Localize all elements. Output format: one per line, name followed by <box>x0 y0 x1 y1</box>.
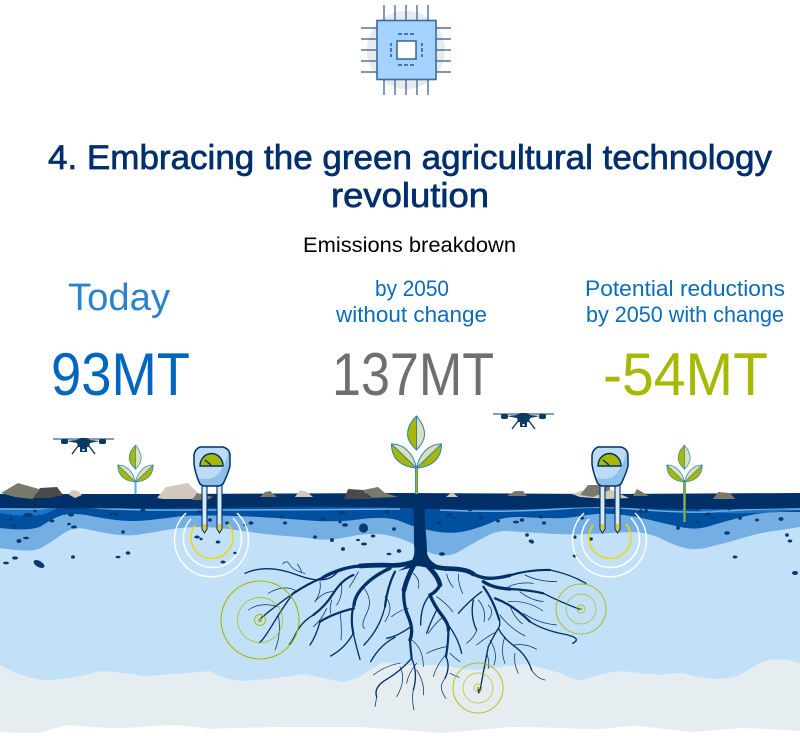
plant: right seedling <box>667 445 702 522</box>
sensor: right soil probe with signal rings <box>572 447 646 577</box>
column heading: today: Today <box>68 277 170 319</box>
title: revolution <box>331 177 489 215</box>
column heading: potential reductions: Potential reductions <box>585 276 785 301</box>
figure: -54MT with change: -54MT <box>603 341 768 408</box>
signal rings: left root <box>221 581 299 659</box>
plant: centre seedling <box>392 416 442 494</box>
column heading: by 2050 without change <box>335 276 487 327</box>
drone: right <box>493 413 554 429</box>
figure: 137MT without change: 137MT <box>332 341 494 408</box>
plant: left seedling <box>118 445 153 494</box>
signal rings: bottom root <box>453 663 503 713</box>
drone: left <box>53 438 114 454</box>
rocks <box>1 483 735 500</box>
signal rings: right root <box>556 584 606 634</box>
title: 4. Embracing the green agricultural technology <box>48 139 772 177</box>
title <box>48 139 772 215</box>
sensor: left soil probe with signal rings <box>174 447 248 577</box>
figure: 93MT today: 93MT <box>51 341 190 408</box>
subtitle: emissions breakdown: Emissions breakdown <box>303 234 516 257</box>
column heading: potential reductions <box>585 276 785 327</box>
column heading: by 2050 without change: without change <box>335 302 487 327</box>
column heading: by 2050 without change: by 2050 <box>375 276 449 301</box>
icon: microchip <box>361 5 451 95</box>
soil pebbles <box>3 506 798 575</box>
soil layers <box>0 493 800 736</box>
column heading: potential reductions: by 2050 with change <box>586 302 784 327</box>
root system <box>245 505 586 710</box>
